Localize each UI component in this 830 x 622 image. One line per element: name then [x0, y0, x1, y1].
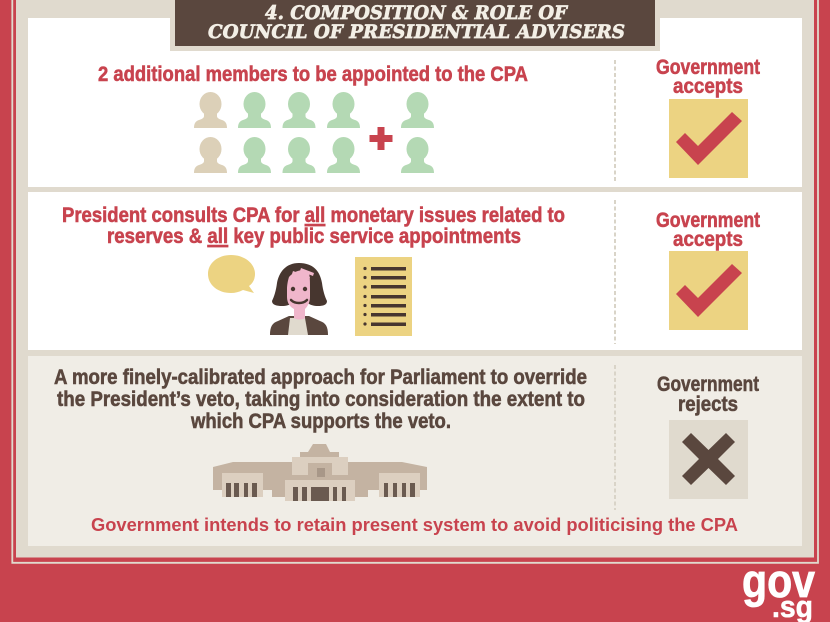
divider: panel 1: [614, 60, 616, 510]
icon: cross: [669, 420, 748, 499]
verdict: accepts second line: accepts: [673, 75, 743, 98]
panel: additional members: [28, 18, 802, 187]
title line 2: COUNCIL OF PRESIDENTIAL ADVISERS: [208, 21, 625, 43]
icon: check: [669, 99, 748, 178]
icon: speech bubble: [208, 255, 255, 293]
icon: check: [669, 251, 748, 330]
note: retain present system: Government intends to retain present system to avoid politicising the CPA: [91, 515, 738, 535]
icon: existing and new members: [194, 92, 434, 173]
icon: president: [270, 263, 328, 335]
title line 1: 4. COMPOSITION & ROLE OF: [265, 2, 568, 24]
icon: plus: [370, 127, 392, 150]
verdict: accepts second line: accepts: [673, 228, 743, 251]
heading: additional members: 2 additional members to be appointed to the CPA: [98, 63, 528, 86]
verdict: accepts: Government: [656, 56, 760, 79]
icon: document list: [355, 257, 412, 336]
panel: veto override: [28, 356, 802, 546]
verdict: rejects: Government: [657, 373, 759, 396]
text: consultation line 1: President consults CPA for all monetary issues related to: [62, 204, 565, 227]
title banner: [170, 0, 660, 51]
text: veto line 3: which CPA supports the veto.: [190, 410, 451, 433]
logo: gov.sg: gov: [742, 554, 815, 607]
text: veto line 2: the President’s veto, taking into consideration the extent to: [57, 388, 585, 411]
text: consultation line 2: reserves & all key public service appointments: [107, 225, 521, 248]
text: veto line 1: A more finely-calibrated approach for Parliament to override: [54, 366, 587, 389]
icon: parliament building: [213, 444, 427, 501]
verdict: accepts: Government: [656, 209, 760, 232]
panel: consultation: [28, 192, 802, 350]
verdict: rejects second line: rejects: [678, 393, 738, 416]
